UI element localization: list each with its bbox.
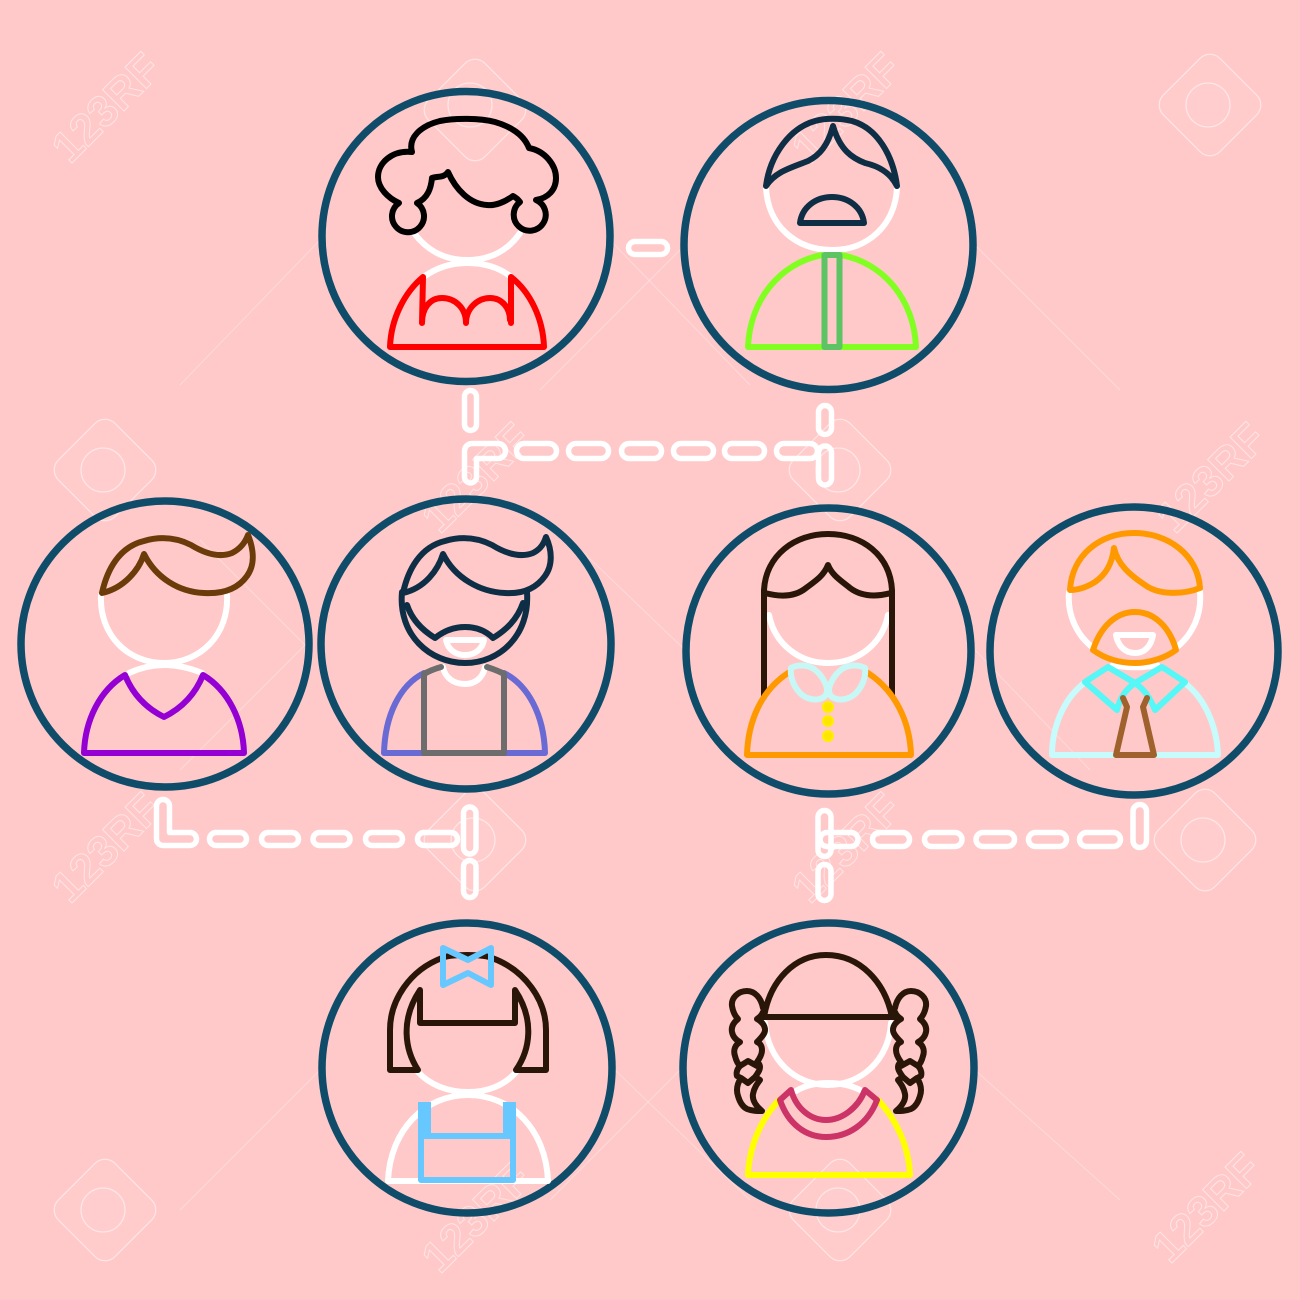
overall bib: [421, 1136, 513, 1180]
person: daughter long hair: [686, 508, 971, 794]
blue sleeves: [384, 673, 545, 753]
watermark layer: 123RF: [42, 44, 170, 172]
person: son-in-law left: [21, 501, 309, 787]
face: [101, 595, 227, 663]
watermark layer: 123RF: [42, 784, 170, 912]
button 1: [823, 702, 833, 712]
white body: [388, 1095, 548, 1181]
neck: [443, 667, 485, 684]
watermark layer: 123RF: [1147, 414, 1275, 542]
portrait ring: [21, 501, 309, 787]
button 3: [823, 731, 833, 741]
suspenders: [424, 667, 504, 753]
connector: right couple to daughter: [818, 804, 1146, 900]
hair cap: [761, 955, 897, 1017]
watermark layer: 123RF: [1142, 1144, 1270, 1272]
head outline: [402, 592, 527, 663]
left braid: [732, 991, 765, 1111]
orange hair: [1070, 533, 1200, 593]
watermark layer: 123RF: [782, 784, 910, 912]
purple sweater: [84, 675, 244, 753]
placket: [824, 255, 840, 347]
connector: left couple to daughter: [156, 800, 476, 898]
watermark layer: 123RF: [782, 44, 910, 172]
person: father with beard: [321, 499, 611, 789]
portrait ring: [321, 499, 611, 789]
shoulders: [129, 665, 202, 673]
face: [1069, 592, 1200, 647]
person: grandfather: [684, 100, 973, 390]
mouth: [446, 640, 484, 655]
face: [769, 615, 888, 663]
watermark layer: 123RF: [412, 414, 540, 542]
mouth: [1116, 635, 1153, 653]
green jacket: [748, 255, 916, 347]
blue bow: [443, 948, 491, 985]
shoulders: [425, 263, 510, 276]
portrait ring: [683, 923, 974, 1213]
button 2: [823, 716, 833, 726]
face: [765, 1023, 891, 1085]
portrait ring: [322, 923, 612, 1213]
collar: [791, 665, 865, 700]
pale blue shirt: [1052, 684, 1218, 755]
curly hair with ear curls: [378, 119, 556, 232]
portrait ring: [684, 100, 973, 390]
watermark layer: 123RF: [412, 1154, 540, 1282]
connector: grandparents marriage link: [628, 242, 668, 254]
beard: [407, 603, 523, 638]
red blouse: [390, 277, 544, 347]
face: [418, 1072, 516, 1092]
goatee: [1093, 612, 1176, 663]
brown hair: [102, 535, 253, 593]
face: [766, 188, 897, 250]
shoulders: [796, 1083, 862, 1091]
brown tie: [1116, 698, 1154, 755]
person: grandmother: [322, 92, 610, 382]
navy hair: [403, 537, 551, 593]
cyan collar: [1085, 667, 1185, 710]
hair: [766, 119, 897, 186]
magenta necklace collar: [780, 1090, 877, 1137]
portrait ring: [686, 508, 971, 794]
moustache: [800, 197, 864, 223]
overall straps: [424, 1102, 510, 1136]
orange dress: [747, 673, 911, 755]
person: girl with bow: [322, 923, 612, 1213]
long hair: [764, 534, 892, 697]
connector: grandparents to children: [464, 390, 832, 485]
yellow top: [748, 1100, 910, 1175]
portrait ring: [990, 507, 1278, 795]
bob hair: [390, 955, 546, 1070]
face: [414, 233, 520, 260]
right braid: [893, 991, 926, 1111]
person: girl with braids: [683, 923, 974, 1213]
person: son-in-law right with goatee: [990, 507, 1278, 795]
chin: [1113, 665, 1157, 667]
portrait ring: [322, 92, 610, 382]
